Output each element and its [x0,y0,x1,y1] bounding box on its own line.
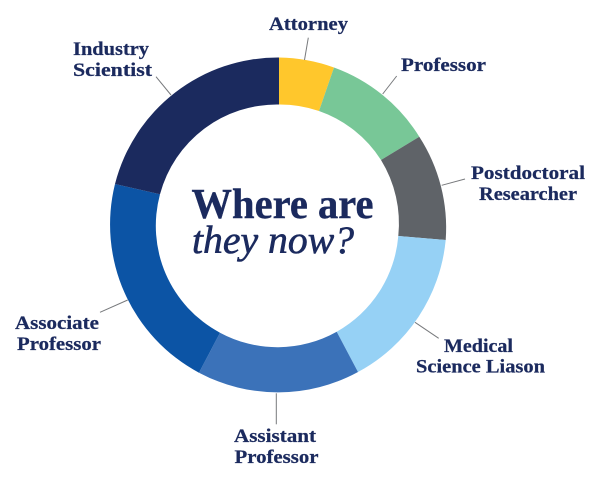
donut chart [110,57,446,392]
label: Medical Science Liason [415,322,545,378]
label: Industry Scientist: Scientist [73,60,153,81]
label: Postdoctoral Researcher: Postdoctoral [471,163,585,184]
label: Industry Scientist [73,39,171,95]
title line: they now?: they now? [192,219,355,262]
segment: Postdoctoral Researcher [381,137,446,240]
label: Assistant Professor: Professor [234,447,319,468]
label: Assistant Professor [234,393,319,468]
center title [192,182,374,262]
segment: Attorney [279,58,334,111]
label: Medical Science Liason: Medical [444,336,513,357]
label: Attorney [269,14,349,60]
label: Industry Scientist: Industry [73,39,150,60]
segment: Associate Professor [110,184,220,373]
label: Medical Science Liason: Science Liason [416,356,545,378]
segment: Medical Science Liason [337,236,446,372]
label: Attorney: Attorney [269,14,349,35]
label: Assistant Professor: Assistant [234,426,317,447]
label: Professor [383,55,487,94]
label: Postdoctoral Researcher: Researcher [479,184,578,205]
title line: Where are: Where are [192,182,374,228]
label: Associate Professor: Professor [17,334,102,355]
segment: Industry Scientist [115,57,279,194]
segment: Professor [319,68,419,160]
label: Professor: Professor [401,55,487,76]
label: Associate Professor [15,300,128,355]
label: Associate Professor: Associate [15,313,99,334]
segment: Assistant Professor [199,332,358,392]
label: Postdoctoral Researcher [442,163,585,205]
